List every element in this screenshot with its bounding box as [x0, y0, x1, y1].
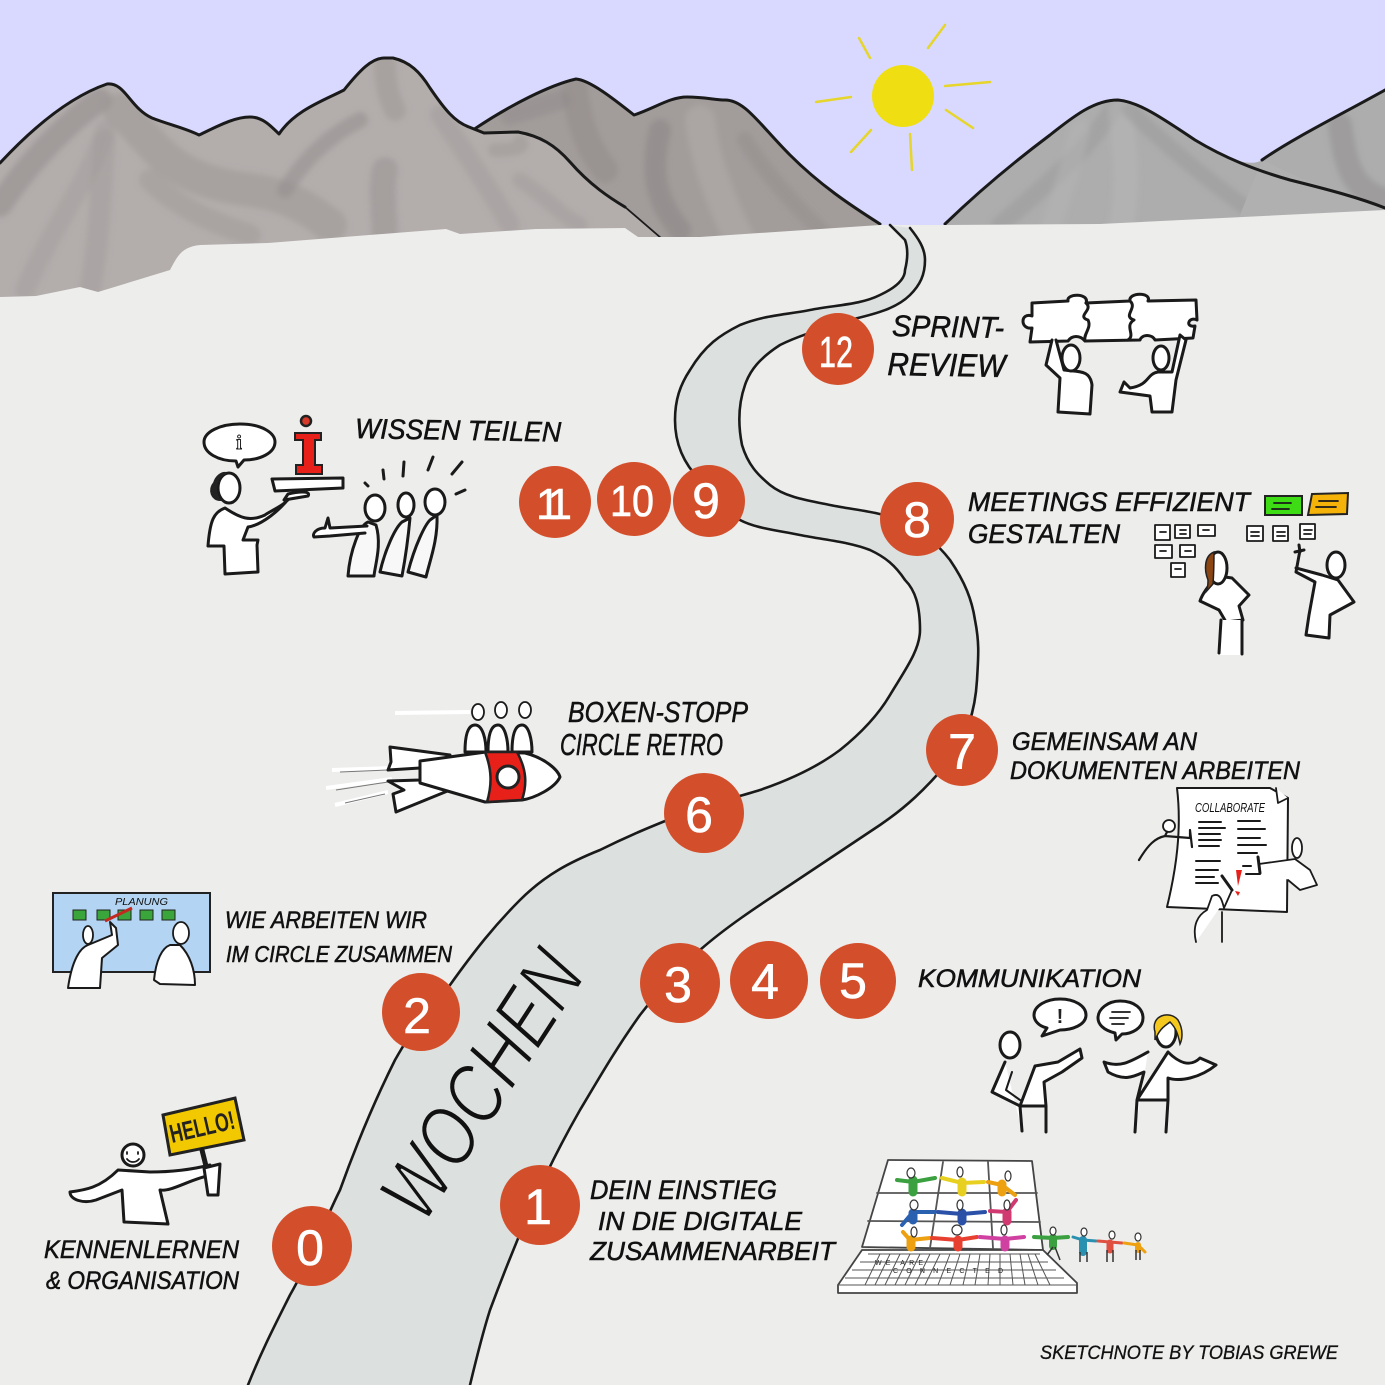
woman with ponytail [1200, 576, 1249, 622]
orange sticky note [1308, 493, 1348, 515]
speech bubble exclamation [1034, 999, 1086, 1036]
badge 3: 3 [664, 957, 692, 1013]
label: Meetings effizient gestalten: GESTALTEN [968, 519, 1120, 549]
badge 6: 6 [685, 787, 713, 843]
badge 11 [519, 466, 591, 538]
badge 9: 9 [692, 473, 720, 529]
label: Boxen-Stopp Circle Retro: BOXEN-STOPP [568, 697, 749, 729]
three listeners [348, 522, 378, 576]
badge 2: 2 [403, 988, 431, 1044]
paper [1167, 788, 1288, 912]
bottom collaborator [1195, 890, 1232, 942]
team [465, 725, 532, 752]
credit: SKETCHNOTE BY TOBIAS GREWE [1040, 1343, 1338, 1364]
speech bubble [204, 424, 275, 467]
left collaborator [1139, 830, 1192, 860]
speech bubble lines [1098, 1001, 1143, 1040]
badge 10: 10 [610, 477, 654, 526]
illustration: communication: ! [1057, 1006, 1063, 1028]
illustration: sharing knowledge: i [236, 432, 242, 454]
illustration: puzzle and two people [1023, 294, 1197, 414]
label: Dein Einstieg in die digitale Zusammenarbeit [589, 1175, 837, 1266]
screen [862, 1160, 1043, 1250]
keyboard [838, 1250, 1077, 1293]
sign [163, 1098, 244, 1190]
badge 5: 5 [839, 953, 867, 1009]
small notes left [1155, 525, 1215, 577]
sign: HELLO! [167, 1105, 238, 1149]
badge 1 [500, 1165, 580, 1245]
badge 0 [272, 1206, 352, 1286]
front left mountains [0, 58, 661, 300]
label: Wie arbeiten wir im Circle zusammen [225, 907, 452, 967]
connected people chain [897, 1178, 1145, 1252]
label: Meetings effizient gestalten: MEETINGS EFFIZIENT [968, 487, 1252, 517]
badge 11: 11 [536, 480, 572, 529]
badge 3 [640, 943, 720, 1023]
right person [1120, 335, 1186, 412]
label: Kennenlernen und Organisation [44, 1236, 240, 1295]
fins [388, 747, 450, 812]
left person [1046, 340, 1092, 414]
green sticky note [1265, 496, 1302, 515]
label: Boxen-Stopp Circle Retro: CIRCLE RETRO [560, 727, 723, 762]
badge 12: 12 [819, 328, 853, 377]
badge 9 [673, 465, 745, 537]
label: Dein Einstieg in die digitale Zusammenarbeit: DEIN EINSTIEG [590, 1175, 777, 1205]
label: Wie arbeiten wir im Circle zusammen: WIE ARBEITEN WIR [225, 907, 427, 934]
sun [816, 25, 990, 170]
small notes right [1247, 524, 1315, 541]
right collaborator [1259, 859, 1317, 890]
label: Kennenlernen und Organisation: & ORGANISATION [46, 1267, 240, 1295]
illustration: hello [70, 1098, 244, 1224]
badge 7 [926, 714, 998, 786]
badge 8: 8 [903, 492, 931, 548]
label: Gemeinsam an Dokumenten arbeiten: DOKUMENTEN ARBEITEN [1010, 757, 1301, 785]
body [420, 752, 560, 802]
label: Wissen teilen: WISSEN TEILEN [355, 413, 562, 448]
label: Kennenlernen und Organisation: KENNENLERNEN [44, 1236, 240, 1264]
illustration: rocket with team [326, 702, 560, 812]
road label: Wochen: WOCHEN [360, 933, 603, 1236]
illustration: communication [992, 999, 1216, 1132]
road [248, 225, 978, 1385]
person [70, 1165, 212, 1224]
badge 6 [664, 773, 744, 853]
illustration: connected laptop: WE ARE [875, 1260, 923, 1267]
label: Boxen-Stopp Circle Retro [560, 697, 749, 762]
label: Sprint-Review: REVIEW [887, 346, 1008, 384]
badge 12 [802, 313, 874, 385]
label: Dein Einstieg in die digitale Zusammenarbeit: IN DIE DIGITALE [598, 1206, 803, 1236]
label: Sprint-Review [887, 310, 1009, 384]
badge 1: 1 [524, 1179, 552, 1235]
label: Sprint-Review: SPRINT- [892, 310, 1004, 345]
woman with blond hair [1104, 1052, 1216, 1132]
presenting woman [208, 497, 290, 574]
red information sign [295, 416, 322, 474]
label: Gemeinsam an Dokumenten arbeiten: GEMEINSAM AN [1012, 728, 1198, 756]
label: Dein Einstieg in die digitale Zusammenarbeit: ZUSAMMENARBEIT [589, 1236, 837, 1266]
badge 8 [880, 482, 954, 556]
puzzle pieces [1023, 294, 1197, 342]
badge 7: 7 [948, 724, 976, 780]
illustration: planning board: PLANUNG [115, 897, 168, 908]
right mountains [945, 90, 1385, 240]
week badges [272, 313, 998, 1286]
illustration: connected laptop [838, 1160, 1145, 1293]
illustration: connected laptop: CONNECTED [893, 1268, 1003, 1275]
illustration: collaborate document: COLLABORATE [1195, 800, 1265, 815]
badge 0: 0 [296, 1220, 324, 1276]
badge 4: 4 [751, 954, 779, 1010]
back centre mountain [474, 78, 882, 237]
illustration: meetings [1155, 493, 1354, 655]
man [992, 1049, 1082, 1132]
label: Kommunikation: KOMMUNIKATION [918, 965, 1142, 993]
speed lines [326, 712, 470, 805]
illustration: collaborate document [1139, 788, 1317, 942]
badge 10 [597, 462, 671, 536]
badge 2 [382, 973, 460, 1051]
badge 5 [820, 943, 896, 1019]
tray [272, 478, 343, 491]
label: Wie arbeiten wir im Circle zusammen: IM CIRCLE ZUSAMMEN [226, 941, 452, 967]
label: Meetings effizient gestalten [968, 487, 1252, 549]
illustration: sharing knowledge [204, 416, 465, 577]
illustration: planning board [53, 893, 210, 988]
badge 4 [730, 941, 808, 1019]
man pointing up [1296, 550, 1354, 638]
label: Gemeinsam an Dokumenten arbeiten [1010, 728, 1301, 785]
